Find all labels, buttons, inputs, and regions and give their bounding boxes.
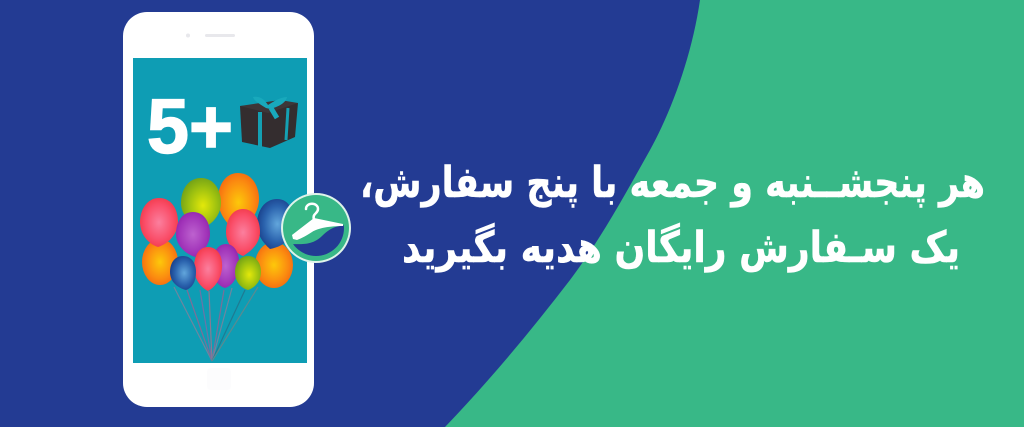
icon: hanger badge: [281, 193, 351, 263]
balloons: [140, 173, 294, 291]
green curved panel: [445, 0, 1024, 427]
balloon strings: [174, 287, 258, 361]
phone screen: [133, 58, 307, 363]
five plus label: 5+: [147, 84, 233, 170]
icon: gift box: [240, 97, 298, 148]
phone camera: [186, 34, 190, 38]
phone: [123, 12, 314, 407]
phone home button: [207, 368, 231, 390]
headline text: [360, 158, 985, 273]
phone speaker: [205, 34, 235, 37]
